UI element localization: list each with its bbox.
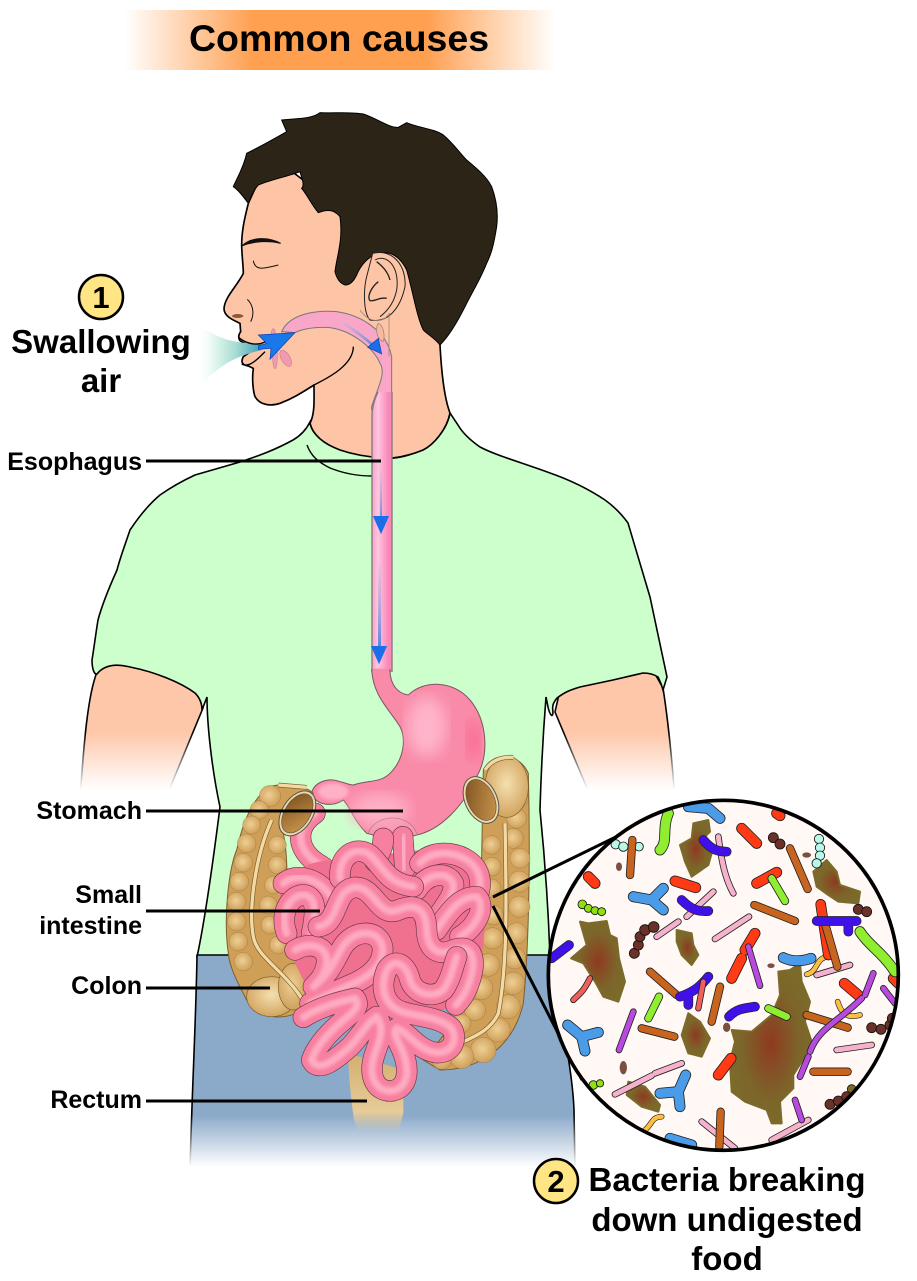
leader lines to organs bbox=[146, 461, 403, 1101]
right colon bbox=[423, 756, 530, 1070]
organ labels bbox=[7, 448, 142, 1114]
number badge 2 bbox=[534, 1159, 578, 1203]
label: bacteria: Bacteria breaking bbox=[589, 1161, 865, 1198]
eye bbox=[253, 261, 278, 268]
number badge 2: 2 bbox=[547, 1164, 565, 1199]
duodenum tube bbox=[301, 813, 340, 880]
eyebrow bbox=[242, 239, 281, 246]
esophagus bbox=[371, 392, 392, 672]
colon band bbox=[252, 785, 307, 998]
jaw line bbox=[314, 347, 353, 385]
left colon opening bbox=[271, 784, 323, 842]
label: bacteria: food bbox=[691, 1240, 763, 1277]
title banner: Common causes bbox=[189, 17, 489, 59]
organ labels: Small bbox=[75, 881, 142, 909]
rectum bbox=[348, 1053, 403, 1132]
number badge 1: 1 bbox=[92, 280, 110, 315]
label: bacteria: down undigested bbox=[591, 1201, 863, 1238]
stomach bbox=[312, 669, 485, 838]
human figure bbox=[70, 113, 680, 1176]
air stream bbox=[197, 323, 262, 390]
organ labels: Esophagus bbox=[7, 448, 142, 476]
label: swallowing air: Swallowing bbox=[11, 323, 191, 360]
organ labels: Colon bbox=[71, 972, 142, 1000]
organ labels: Rectum bbox=[50, 1086, 142, 1114]
left colon bbox=[226, 784, 323, 1017]
magnified bacteria circle bbox=[548, 800, 898, 1150]
number badge 1 bbox=[79, 275, 123, 319]
organ labels: intestine bbox=[39, 912, 142, 940]
title banner bbox=[125, 10, 555, 70]
cocci chains bbox=[578, 833, 897, 1109]
colon band bbox=[463, 757, 513, 1042]
arms bbox=[70, 660, 680, 804]
label: swallowing air: air bbox=[81, 362, 121, 399]
label: bacteria bbox=[534, 1159, 865, 1277]
mouth lips bbox=[238, 337, 265, 365]
throat arrow bbox=[337, 320, 382, 354]
tongue bbox=[271, 329, 294, 369]
zoom lines to magnified circle bbox=[493, 832, 626, 1080]
air arrow bbox=[258, 333, 295, 359]
collar line bbox=[307, 445, 372, 476]
label: swallowing air bbox=[11, 275, 191, 399]
small intestine bbox=[280, 837, 485, 1091]
esophagus arrows bbox=[371, 470, 389, 664]
throat and pharynx bbox=[282, 311, 392, 410]
shirt bbox=[92, 413, 667, 957]
epiglottis and glands bbox=[360, 310, 390, 357]
ear bbox=[364, 252, 405, 321]
rod bacteria bbox=[552, 807, 898, 1148]
face and neck bbox=[224, 170, 450, 458]
hair bbox=[233, 113, 497, 345]
undigested food bbox=[571, 820, 860, 1123]
right colon opening bbox=[456, 771, 506, 829]
organ labels: Stomach bbox=[36, 797, 142, 825]
head bbox=[197, 113, 497, 458]
digestive organs bbox=[226, 669, 530, 1132]
pants bbox=[180, 955, 580, 1176]
nose bbox=[247, 299, 253, 322]
